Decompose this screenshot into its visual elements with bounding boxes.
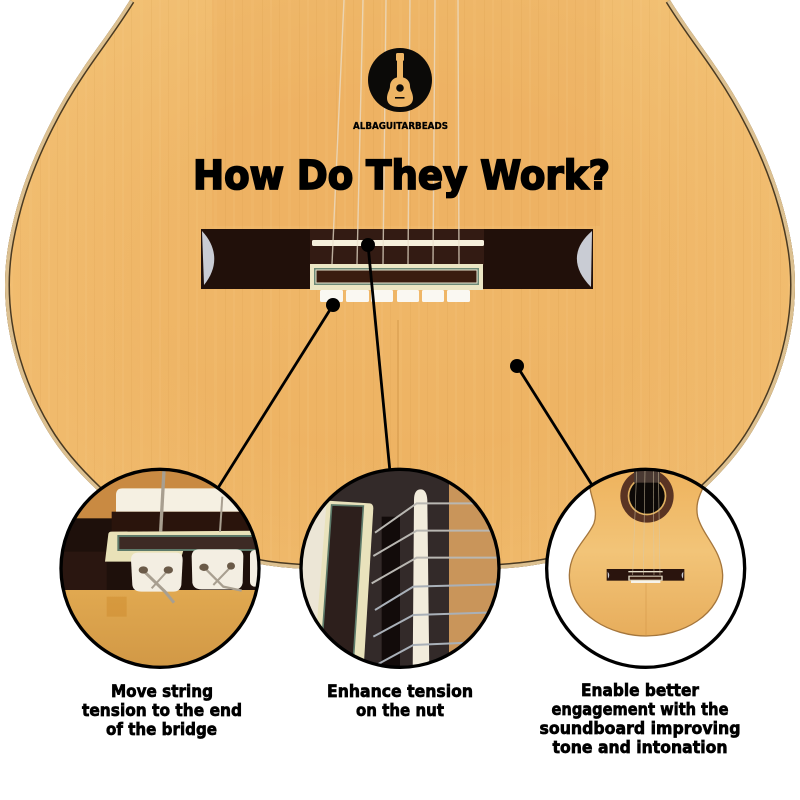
guitar body background xyxy=(0,0,800,600)
panel: whole guitar view xyxy=(547,467,745,667)
title: How Do They Work? xyxy=(193,153,610,199)
icon: guitar xyxy=(387,53,413,107)
caption: nut xyxy=(327,682,473,721)
pointer: soundboard xyxy=(510,359,592,485)
caption: soundboard: Enable better xyxy=(581,681,700,701)
guitar bridge xyxy=(201,229,593,302)
caption: soundboard: soundboard improving xyxy=(540,719,740,739)
logo xyxy=(368,48,432,112)
caption: soundboard: tone and intonation xyxy=(552,738,728,758)
caption: bridge: Move string xyxy=(111,682,213,702)
mini bridge xyxy=(607,569,684,583)
caption: nut: Enhance tension xyxy=(327,682,473,702)
caption: bridge: tension to the end xyxy=(82,701,242,721)
mini guitar body xyxy=(569,467,723,636)
pointer: bridge end xyxy=(218,298,340,488)
caption: nut: on the nut xyxy=(356,701,444,721)
panel: bridge tie-block close-up xyxy=(59,468,261,669)
caption: bridge xyxy=(82,682,242,740)
pointer: nut xyxy=(361,238,390,472)
caption: soundboard xyxy=(540,681,740,758)
brand name: ALBAGUITARBEADS xyxy=(353,121,448,132)
panel: nut close-up xyxy=(297,467,503,673)
caption: bridge: of the bridge xyxy=(106,720,217,740)
strings xyxy=(332,0,459,264)
caption: soundboard: engagement with the xyxy=(552,700,728,720)
